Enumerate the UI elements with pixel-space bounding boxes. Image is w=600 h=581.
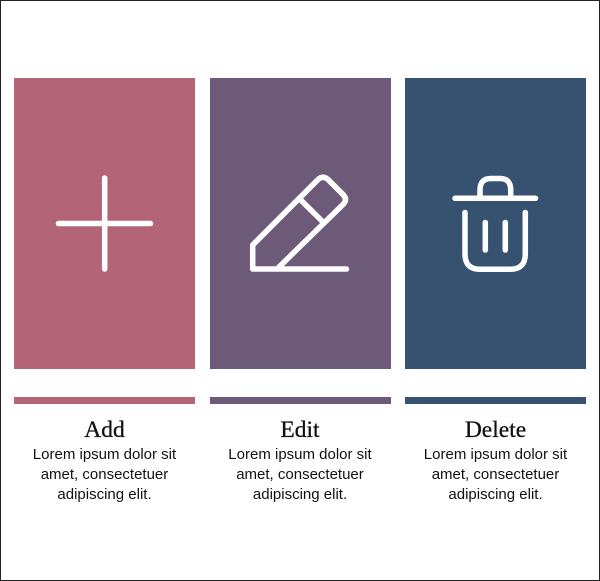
text: delete description: amet, consectetuer	[432, 466, 559, 483]
accent bar: add	[14, 397, 195, 404]
text: edit description	[228, 446, 372, 503]
icon: plus	[58, 178, 150, 269]
heading: add: Add	[84, 417, 125, 443]
text: add description: amet, consectetuer	[41, 466, 168, 483]
text: delete description	[424, 446, 568, 503]
text: delete description: adipiscing elit.	[448, 486, 543, 503]
accent bar: delete	[405, 397, 586, 404]
panel: add	[14, 78, 195, 369]
heading: delete: Delete	[465, 417, 526, 443]
panel: edit	[210, 78, 390, 369]
text: add description: Lorem ipsum dolor sit	[33, 446, 176, 463]
text: edit description: amet, consectetuer	[236, 466, 364, 483]
text: delete description: Lorem ipsum dolor sit	[424, 446, 567, 463]
accent bar: edit	[210, 397, 390, 404]
panel: delete	[405, 78, 586, 369]
icon: trash can	[455, 178, 536, 269]
heading: edit: Edit	[280, 417, 320, 443]
text: add description	[33, 446, 176, 503]
text: edit description: adipiscing elit.	[253, 486, 347, 503]
text: edit description: Lorem ipsum dolor sit	[228, 446, 372, 463]
icon: pencil	[253, 177, 346, 269]
text: add description: adipiscing elit.	[57, 486, 152, 503]
